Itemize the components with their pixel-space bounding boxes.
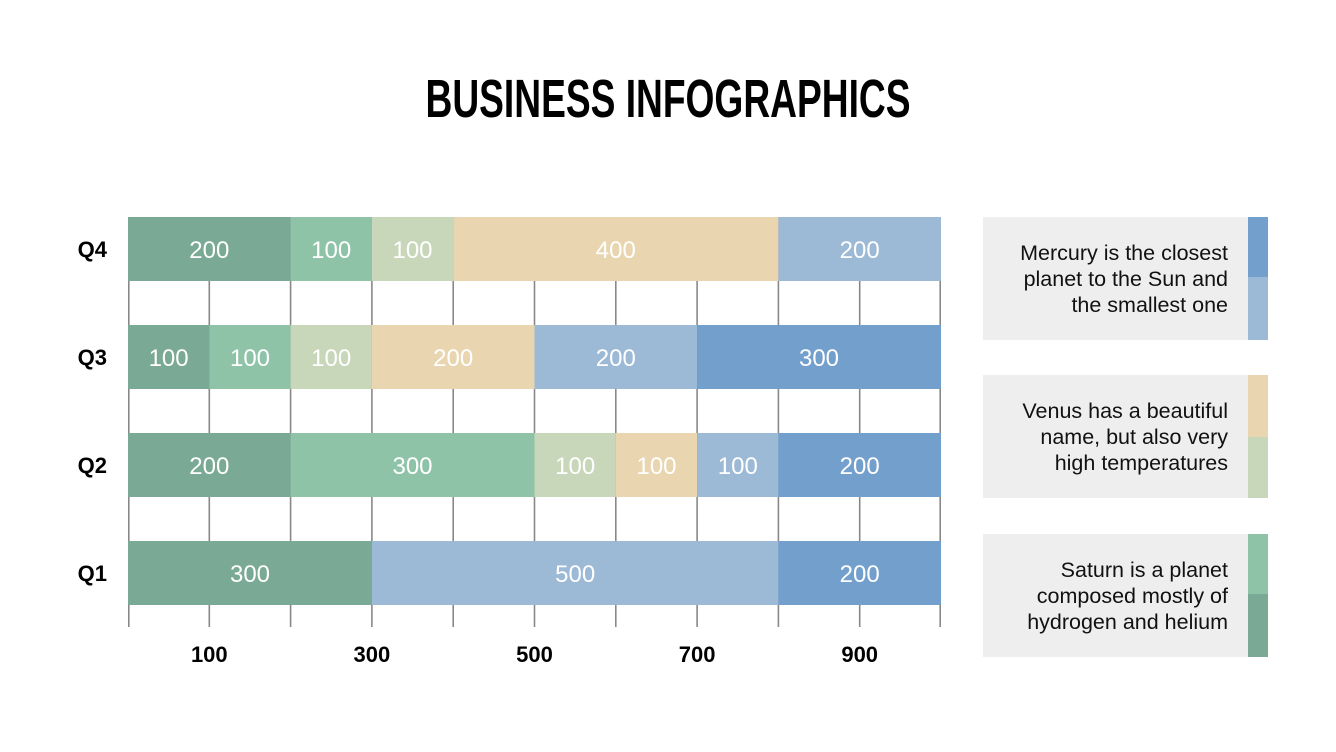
panel: Venus — [983, 375, 1268, 498]
bar: Q3: 300 — [799, 345, 839, 372]
x-axis labels: 500 — [516, 642, 553, 667]
x-axis labels: 300 — [354, 642, 390, 667]
bar: Q2: 100 — [636, 453, 677, 480]
panel: Saturn: composed mostly of — [1037, 584, 1228, 608]
bar: Q4: 100 — [311, 237, 351, 264]
panel: Venus: Venus has a beautiful — [1022, 399, 1228, 423]
panel: Saturn: hydrogen and helium — [1027, 610, 1228, 634]
y-axis labels: Q1 — [78, 561, 107, 586]
bar: Q3: 200 — [596, 345, 636, 372]
panel: Saturn — [983, 534, 1268, 657]
bar: Q2 — [128, 433, 941, 497]
bar: Q4: 200 — [189, 237, 229, 264]
bar: Q3: 100 — [311, 345, 351, 372]
bar: Q3 — [128, 325, 941, 389]
x-axis labels: 700 — [679, 642, 715, 667]
bar: Q3: 100 — [230, 345, 270, 372]
bar: Q1: 300 — [230, 561, 270, 588]
panel: Mercury: the smallest one — [1071, 293, 1228, 317]
bar: Q4: 400 — [596, 237, 636, 264]
bar: Q4 — [128, 217, 941, 281]
x-axis labels: 900 — [841, 642, 878, 667]
bar: Q3: 100 — [149, 345, 189, 372]
bar: Q1: 200 — [840, 561, 880, 588]
x-axis labels: 100 — [191, 642, 228, 667]
panel: Mercury: Mercury is the closest — [1020, 241, 1228, 265]
panel: Mercury — [983, 217, 1268, 340]
bar: Q2: 200 — [840, 453, 880, 480]
bar: Q1: 500 — [555, 561, 595, 588]
bar: Q4: 100 — [392, 237, 433, 264]
bar: Q2: 300 — [392, 453, 433, 480]
bar: Q2: 100 — [555, 453, 595, 480]
bar: Q2: 100 — [718, 453, 758, 480]
panel: Saturn: Saturn is a planet — [1061, 558, 1228, 582]
bar: Q3: 200 — [433, 345, 473, 372]
title: BUSINESS INFOGRAPHICS — [426, 69, 910, 129]
y-axis labels: Q4 — [78, 237, 108, 262]
x-axis labels — [191, 642, 878, 667]
bar: Q2: 200 — [189, 453, 229, 480]
y-axis labels: Q2 — [78, 453, 107, 478]
panel: Venus: name, but also very — [1040, 425, 1228, 449]
panel: Mercury: planet to the Sun and — [1024, 267, 1228, 291]
panel: Venus: high temperatures — [1055, 451, 1228, 475]
bar: Q1 — [128, 541, 941, 605]
y-axis labels: Q3 — [78, 345, 107, 370]
bar: Q4: 200 — [840, 237, 880, 264]
chart: stacked bars — [78, 217, 941, 667]
y-axis labels — [78, 237, 108, 586]
